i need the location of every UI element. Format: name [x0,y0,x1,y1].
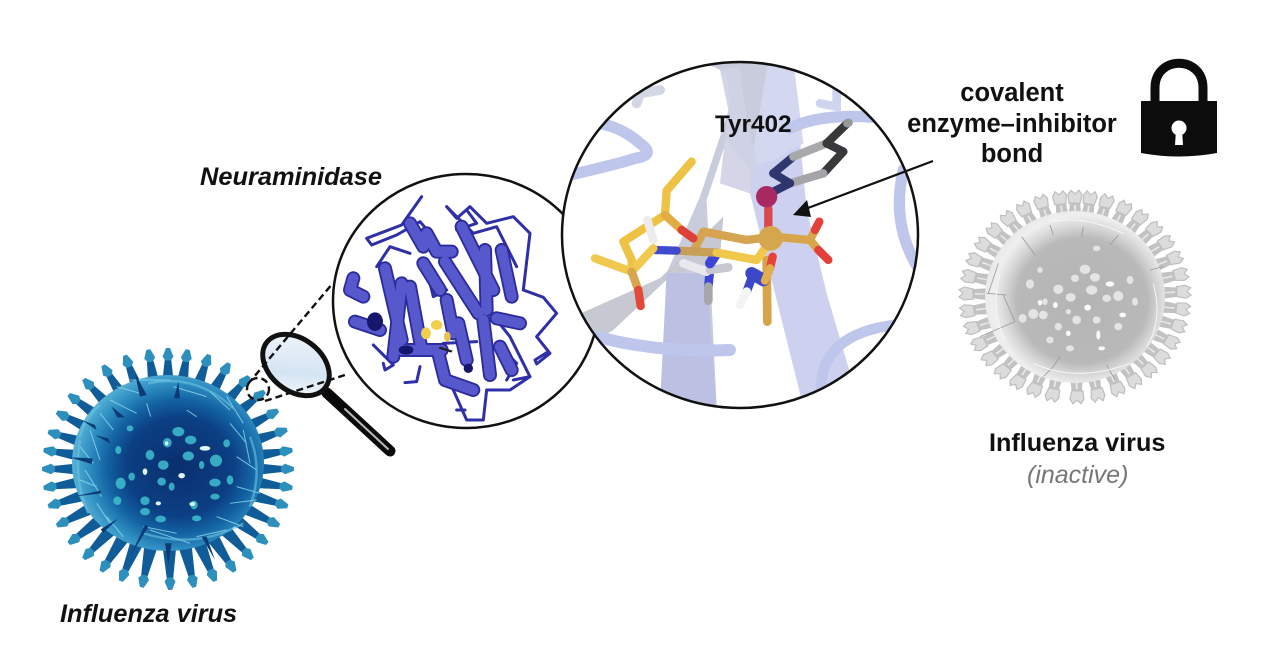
magnifier handle [327,393,390,451]
callout: covalent enzyme–inhibitor bond: bond [981,140,1043,168]
zoom circle: active site close-up [562,60,922,408]
label: Influenza virus (inactive): Influenza virus [989,429,1165,457]
covalent bond atoms [756,186,777,207]
arrow: points to covalent bond [793,161,933,217]
virus: active influenza (blue) [42,348,294,590]
circle background [562,62,918,408]
body texture: surface blobs and streaks [70,373,260,565]
callout: covalent enzyme–inhibitor bond: covalent [960,79,1064,107]
grey spikes [959,190,1191,404]
bound ligand [367,312,473,373]
faded protein ribbons [570,60,922,407]
virus: inactive influenza (grey) [959,190,1191,404]
grey body sphere [985,211,1165,383]
virus body sphere [72,375,264,551]
label: Tyr402: Tyr402 [715,111,792,138]
protein ribbon [350,197,557,420]
label: Influenza virus (inactive) [989,429,1165,489]
grey body texture [980,220,1163,380]
label: inactive state: (inactive) [1027,461,1128,489]
protein loops [367,197,557,420]
magnifier lens [251,322,341,408]
circle outline [562,62,918,408]
lower blue and tan sticks [683,253,767,322]
ligand and Tyr402 stick model [595,123,849,322]
callout: covalent enzyme–inhibitor bond: enzyme–inhibitor [907,110,1117,138]
label: Influenza virus (active): Influenza virus [60,600,237,628]
icon: padlock [1141,63,1217,156]
dashed zoom indicators [247,283,345,401]
magnifying glass with dashed zoom lines [247,283,390,451]
spikes: blue surface proteins [42,348,294,590]
zoom circle: neuraminidase structure [333,174,599,428]
circle outline [333,174,599,428]
main ligand sticks [595,162,828,306]
beta strand outlines [350,223,520,390]
Tyr402 ring [770,123,849,193]
label: Neuraminidase: Neuraminidase [200,163,382,191]
beta strand fills [350,223,520,390]
